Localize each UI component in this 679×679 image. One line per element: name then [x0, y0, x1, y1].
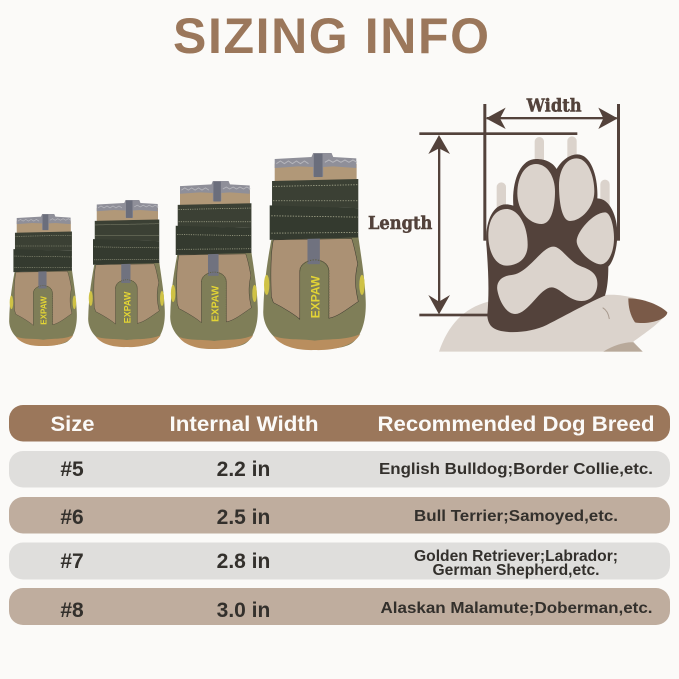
row size 7 — [9, 542, 670, 580]
row size 8: Alaskan Malamute;Doberman,etc. — [380, 600, 652, 617]
width measurement arrow — [483, 104, 620, 241]
boot size 7 — [170, 181, 258, 349]
sizing table — [9, 405, 670, 625]
length measurement arrow — [419, 132, 577, 316]
table header — [9, 405, 670, 442]
panel: four boot sizes — [9, 153, 366, 350]
icon: dog snout — [439, 295, 667, 352]
boot size 6 — [88, 200, 165, 347]
boot size 5 — [9, 214, 77, 346]
panel: paw measurement diagram — [368, 95, 667, 352]
row size 5: #5 — [60, 458, 84, 481]
row size 6 — [9, 497, 670, 534]
row size 6: Bull Terrier;Samoyed,etc. — [414, 508, 618, 525]
table header: Size — [50, 413, 94, 436]
boot size 7: EXPAW — [210, 285, 221, 322]
row size 6: 2.5 in — [217, 506, 270, 529]
row size 5 — [9, 451, 670, 488]
row size 5: 2.2 in — [217, 458, 270, 481]
table header: Internal Width — [170, 413, 318, 436]
row size 7: Golden Retriever;Labrador; — [414, 548, 618, 565]
icon: claws — [501, 141, 605, 212]
title: SIZING INFO — [173, 8, 489, 64]
boot size 8: EXPAW — [309, 275, 323, 318]
icon: paw — [486, 154, 617, 332]
row size 6: #6 — [60, 506, 84, 529]
table header: Recommended Dog Breed — [378, 413, 654, 436]
row size 8: #8 — [60, 599, 84, 622]
row size 7: German Shepherd,etc. — [432, 562, 600, 579]
row size 5: English Bulldog;Border Collie,etc. — [379, 461, 653, 478]
label: Length: Length — [368, 213, 432, 234]
label: Width: Width — [526, 95, 582, 116]
boot size 5: EXPAW — [39, 296, 48, 325]
boot size 8 — [263, 153, 366, 350]
boot size 6: EXPAW — [122, 291, 132, 323]
row size 8 — [9, 588, 670, 625]
row size 8: 3.0 in — [217, 599, 270, 622]
row size 7: 2.8 in — [217, 550, 270, 573]
row size 7: #7 — [60, 550, 84, 573]
